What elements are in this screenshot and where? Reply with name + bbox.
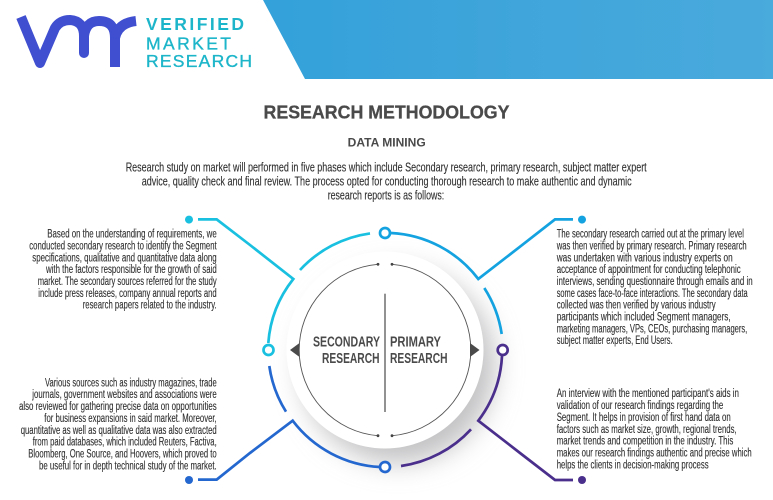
label: primary research: RESEARCH (390, 351, 448, 367)
logo wordmark: MARKET (146, 34, 231, 54)
circular diagram (185, 216, 586, 484)
connector: cyan top-left (185, 216, 370, 355)
text block: secondary research top: market. The secondary sources referred for the study (38, 276, 217, 288)
label: secondary research: RESEARCH (322, 351, 380, 367)
text block: secondary research bottom: be useful for in depth technical study of the market. (39, 460, 217, 472)
logo wordmark: VERIFIED (146, 14, 244, 34)
text block: primary research top: subject matter experts, End Users. (557, 335, 673, 347)
text block: secondary research top: with the factors responsible for the growth of said (45, 264, 217, 276)
icon: vmr logo mark (21, 17, 136, 67)
logo wordmark: RESEARCH (146, 51, 252, 71)
central disc shadow (301, 269, 495, 463)
text block: secondary research bottom: Various sources such as industry magazines, trade (45, 377, 217, 389)
intro text (126, 160, 647, 202)
arrow left (290, 343, 300, 357)
text block: secondary research top: conducted secondary research to identify the Segment (29, 240, 217, 252)
central white disc (286, 252, 484, 448)
text block: secondary research top (29, 229, 217, 312)
text block: secondary research top: include press releases, company annual reports and (38, 288, 217, 300)
label: secondary research (313, 334, 380, 367)
title: RESEARCH METHODOLOGY (264, 101, 510, 122)
label: primary research: PRIMARY (390, 334, 441, 350)
intro text: research reports is as follows: (328, 187, 444, 202)
center divider line (384, 294, 386, 412)
arrow right (470, 343, 480, 357)
text block: secondary research bottom: from paid databases, which included Reuters, Factiva, (33, 437, 217, 449)
text block: secondary research bottom (19, 377, 217, 472)
subtitle: DATA MINING (348, 138, 426, 150)
label: secondary research: SECONDARY (313, 334, 380, 350)
text block: primary research bottom (557, 388, 752, 472)
text block: secondary research bottom: quantitative as well as qualitative data was also extracted (21, 425, 217, 437)
logo wordmark (146, 14, 252, 71)
connector: blue bottom-left (185, 366, 390, 484)
logo (21, 14, 252, 71)
header banner (263, 0, 773, 79)
text block: secondary research bottom: Bloomberg, One Source, and Hoovers, which proved to (28, 448, 217, 460)
text block: secondary research top: Based on the understanding of requirements, we (47, 229, 217, 241)
text block: secondary research top: specifications, qualitative and quantitative data along (32, 252, 217, 264)
inner thin circle (299, 263, 471, 437)
label: primary research (390, 334, 448, 367)
connector: sky blue top-right (380, 216, 586, 334)
text block: secondary research bottom: for business expansions in said market. Moreover, (44, 413, 217, 425)
text block: secondary research bottom: journals, government websites and associations were (32, 389, 217, 401)
text block: secondary research bottom: also reviewed for gathering precise data on opportunities (19, 401, 217, 413)
connector: purple bottom-right (401, 345, 586, 484)
text block: secondary research top: research papers related to the industry. (83, 300, 217, 312)
text block: primary research top (556, 229, 753, 347)
